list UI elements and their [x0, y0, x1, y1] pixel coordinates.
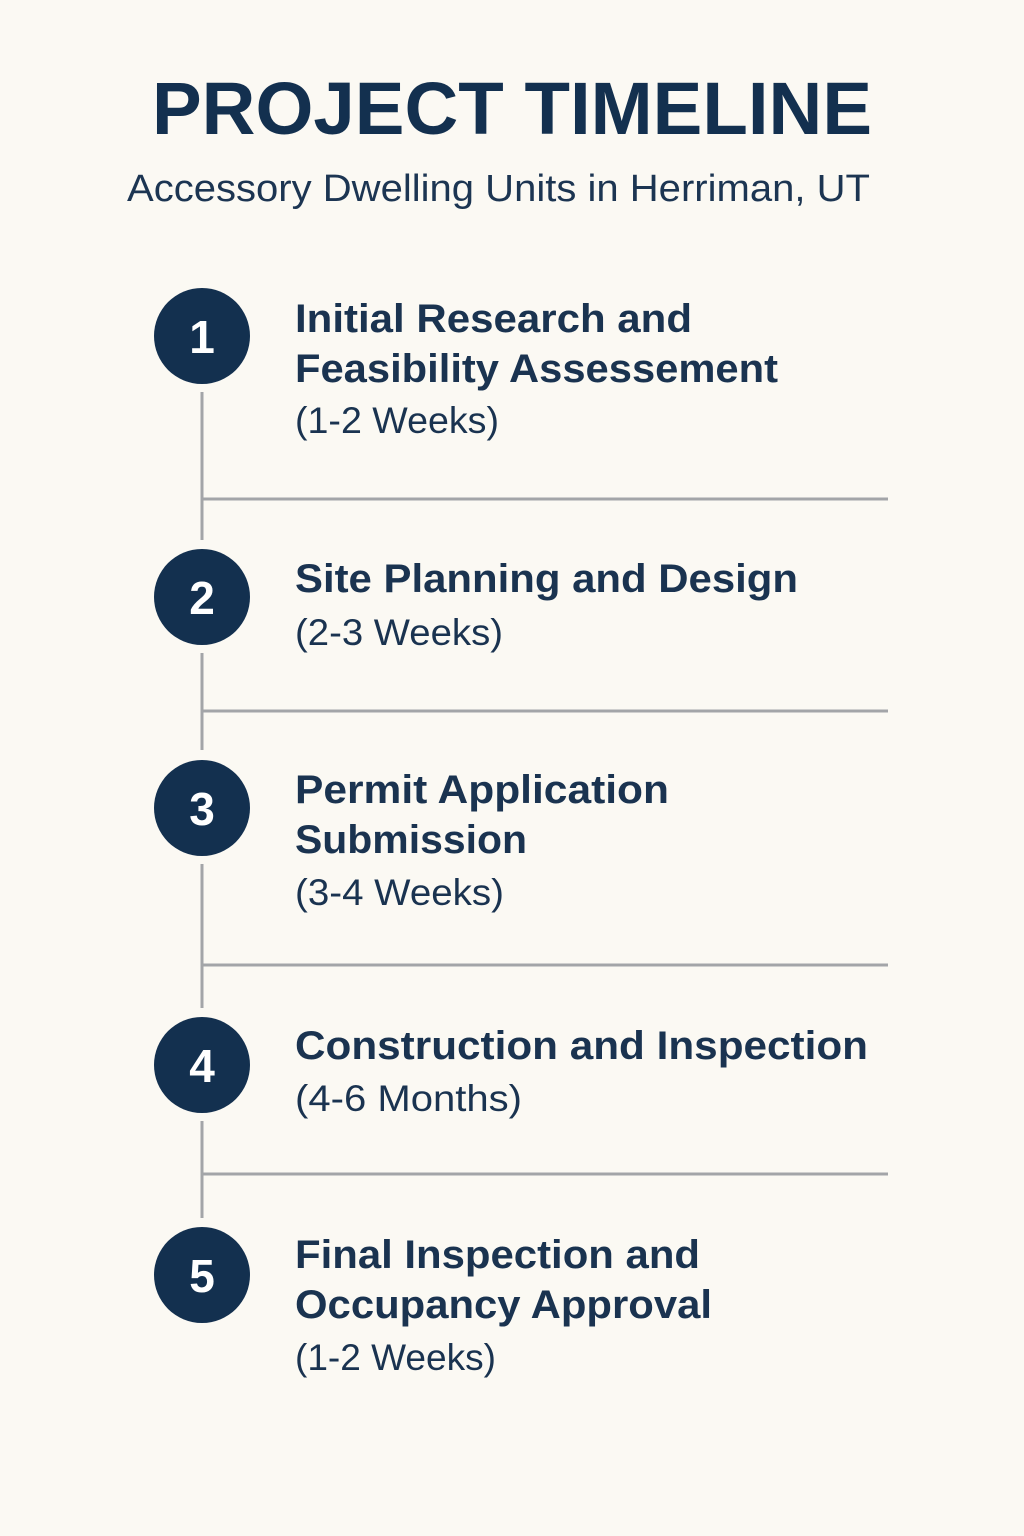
step 1 text: Initial Research and [295, 297, 692, 341]
icon: number 4 circle: 4 [189, 1040, 215, 1092]
step 2 text [295, 557, 798, 653]
step 1 [154, 288, 778, 441]
step 5 text: Occupancy Approval [295, 1283, 712, 1327]
icon: number 1 circle [154, 288, 250, 384]
subtitle: Accessory Dwelling Units in Herriman, UT [127, 168, 870, 210]
icon: number 2 circle [154, 549, 250, 645]
icon: number 5 circle: 5 [189, 1250, 215, 1302]
icon: number 5 circle [154, 1227, 250, 1323]
icon: number 4 circle [154, 1017, 250, 1113]
step 5 text [295, 1233, 712, 1378]
step 4 text [295, 1024, 868, 1119]
step 2 text: Site Planning and Design [295, 557, 798, 601]
step 5 [154, 1227, 712, 1378]
step 3 [154, 760, 669, 913]
step 1 text [295, 297, 778, 441]
step 2 text: (2-3 Weeks) [295, 612, 503, 653]
step 3 text [295, 768, 669, 913]
title: PROJECT TIMELINE [152, 67, 872, 150]
step 4 [154, 1017, 868, 1119]
icon: number 2 circle: 2 [189, 572, 215, 624]
step 5 text: (1-2 Weeks) [295, 1337, 496, 1378]
step 1 text: Feasibility Assessement [295, 347, 778, 391]
step 4 text: Construction and Inspection [295, 1024, 868, 1068]
step 2 [154, 549, 798, 653]
icon: number 3 circle [154, 760, 250, 856]
step 1 text: (1-2 Weeks) [295, 400, 499, 441]
step 5 text: Final Inspection and [295, 1233, 700, 1277]
step 4 text: (4-6 Months) [295, 1078, 522, 1119]
icon: number 3 circle: 3 [189, 783, 215, 835]
step 3 text: Submission [295, 818, 527, 862]
step 3 text: Permit Application [295, 768, 669, 812]
step 3 text: (3-4 Weeks) [295, 872, 504, 913]
icon: number 1 circle: 1 [189, 311, 215, 363]
